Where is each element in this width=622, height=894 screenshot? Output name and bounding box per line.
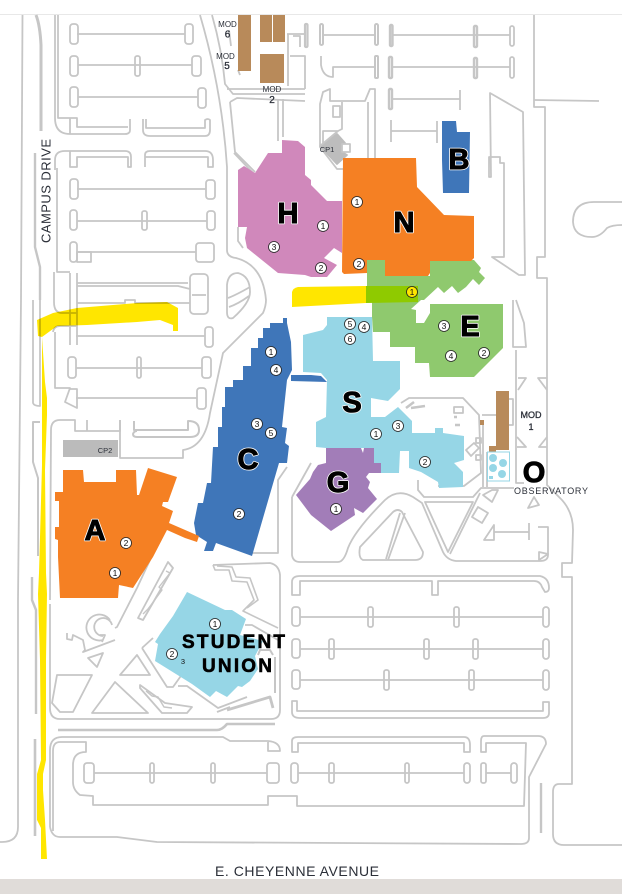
building letters <box>85 144 545 547</box>
building letters: B <box>449 144 469 176</box>
street label: E. Cheyenne Avenue: E. CHEYENNE AVENUE <box>215 863 379 879</box>
numbered entrance markers: 5 <box>269 428 274 438</box>
numbered entrance markers: 4 <box>449 351 454 361</box>
building G <box>296 448 381 531</box>
building A <box>55 468 199 598</box>
numbered entrance markers: 1 <box>269 347 274 357</box>
student union label: STUDENT <box>182 632 285 653</box>
numbered entrance markers: 5 <box>348 319 353 329</box>
observatory icon <box>488 452 510 481</box>
connector C to S <box>291 375 327 382</box>
small map labels: CP1 <box>320 145 334 154</box>
building E <box>367 260 503 377</box>
building S <box>303 317 464 488</box>
student union label: UNION <box>202 656 272 677</box>
building letters: O <box>523 457 545 489</box>
building B <box>442 121 470 193</box>
numbered entrance markers: 2 <box>237 509 242 519</box>
modular building 6 and 5 <box>238 15 251 71</box>
student union label <box>182 632 285 677</box>
building N <box>342 158 474 276</box>
bottom parking <box>50 724 546 844</box>
building letters: A <box>85 515 106 547</box>
numbered entrance markers: 2 <box>357 259 362 269</box>
numbered entrance markers: 4 <box>274 365 279 375</box>
building letters: A <box>85 515 106 547</box>
roundabout island <box>227 273 250 318</box>
numbered entrance markers: 2 <box>423 457 428 467</box>
building letters: N <box>394 207 414 239</box>
small map labels: MOD <box>520 410 542 420</box>
small map labels: 6 <box>225 30 231 40</box>
numbered entrance markers: 1 <box>410 287 415 297</box>
small map labels: MOD <box>216 52 235 61</box>
building letters: C <box>238 444 259 476</box>
building letters: H <box>278 198 298 230</box>
upper-right parking rows <box>320 24 514 143</box>
small map labels: CP2 <box>98 446 112 455</box>
building letters: C <box>238 444 259 476</box>
numbered entrance markers: 1 <box>213 619 218 629</box>
small map labels: OBSERVATORY <box>514 486 588 496</box>
numbered entrance markers: 3 <box>396 421 401 431</box>
modular building 1 <box>480 391 509 452</box>
numbered entrance markers: 4 <box>362 322 367 332</box>
numbered entrance markers: 1 <box>374 429 379 439</box>
numbered entrance markers: 2 <box>482 348 487 358</box>
walkway highlight: overlap <box>366 286 418 303</box>
mid-left parking <box>50 326 213 600</box>
student union surroundings <box>50 560 280 719</box>
building H <box>238 140 342 277</box>
building letters: E <box>460 311 480 343</box>
small map labels: MOD <box>218 20 237 29</box>
building letters: S <box>342 387 362 419</box>
numbered entrance markers <box>110 196 490 666</box>
building letters: G <box>327 467 349 499</box>
modular building 2 <box>260 54 284 83</box>
yellow walkway along Campus Drive <box>37 302 178 859</box>
MOD 1 roads <box>509 300 547 483</box>
small map labels: 2 <box>269 95 275 106</box>
building letters: N <box>394 207 414 239</box>
small map labels: 5 <box>224 61 230 72</box>
numbered entrance markers: 1 <box>334 504 339 514</box>
numbered entrance markers: 2 <box>170 649 175 659</box>
building letters: B <box>449 144 469 176</box>
building letters: E <box>460 311 480 343</box>
CP1 lot <box>320 89 375 169</box>
service loop <box>292 398 548 562</box>
numbered entrance markers: 3 <box>255 419 260 429</box>
building letters: G <box>327 467 349 499</box>
upper-left parking rows <box>70 24 215 262</box>
street label: Campus Drive: CAMPUS DRIVE <box>38 139 54 243</box>
numbered entrance markers: 3 <box>181 657 185 666</box>
numbered entrance markers: 6 <box>348 334 353 344</box>
student union building <box>155 592 263 697</box>
small map labels: MOD <box>263 85 282 94</box>
numbered entrance markers: 1 <box>321 221 326 231</box>
small map labels <box>98 20 588 496</box>
CP2 parking block <box>63 440 118 457</box>
bottom band <box>0 879 622 894</box>
building C <box>194 318 292 556</box>
building letters: S <box>342 387 362 419</box>
numbered entrance markers: 2 <box>319 263 324 273</box>
modular building upper <box>260 15 285 42</box>
center connecting road and parking rows <box>252 467 549 718</box>
numbered entrance markers: 3 <box>442 321 447 331</box>
building letters: H <box>278 198 298 230</box>
walkway highlight: north <box>292 286 366 307</box>
small map labels: 1 <box>528 422 534 432</box>
numbered entrance markers: 3 <box>272 242 277 252</box>
numbered entrance markers: 1 <box>113 568 118 578</box>
numbered entrance markers: 1 <box>355 197 360 207</box>
numbered entrance markers: 2 <box>124 538 129 548</box>
